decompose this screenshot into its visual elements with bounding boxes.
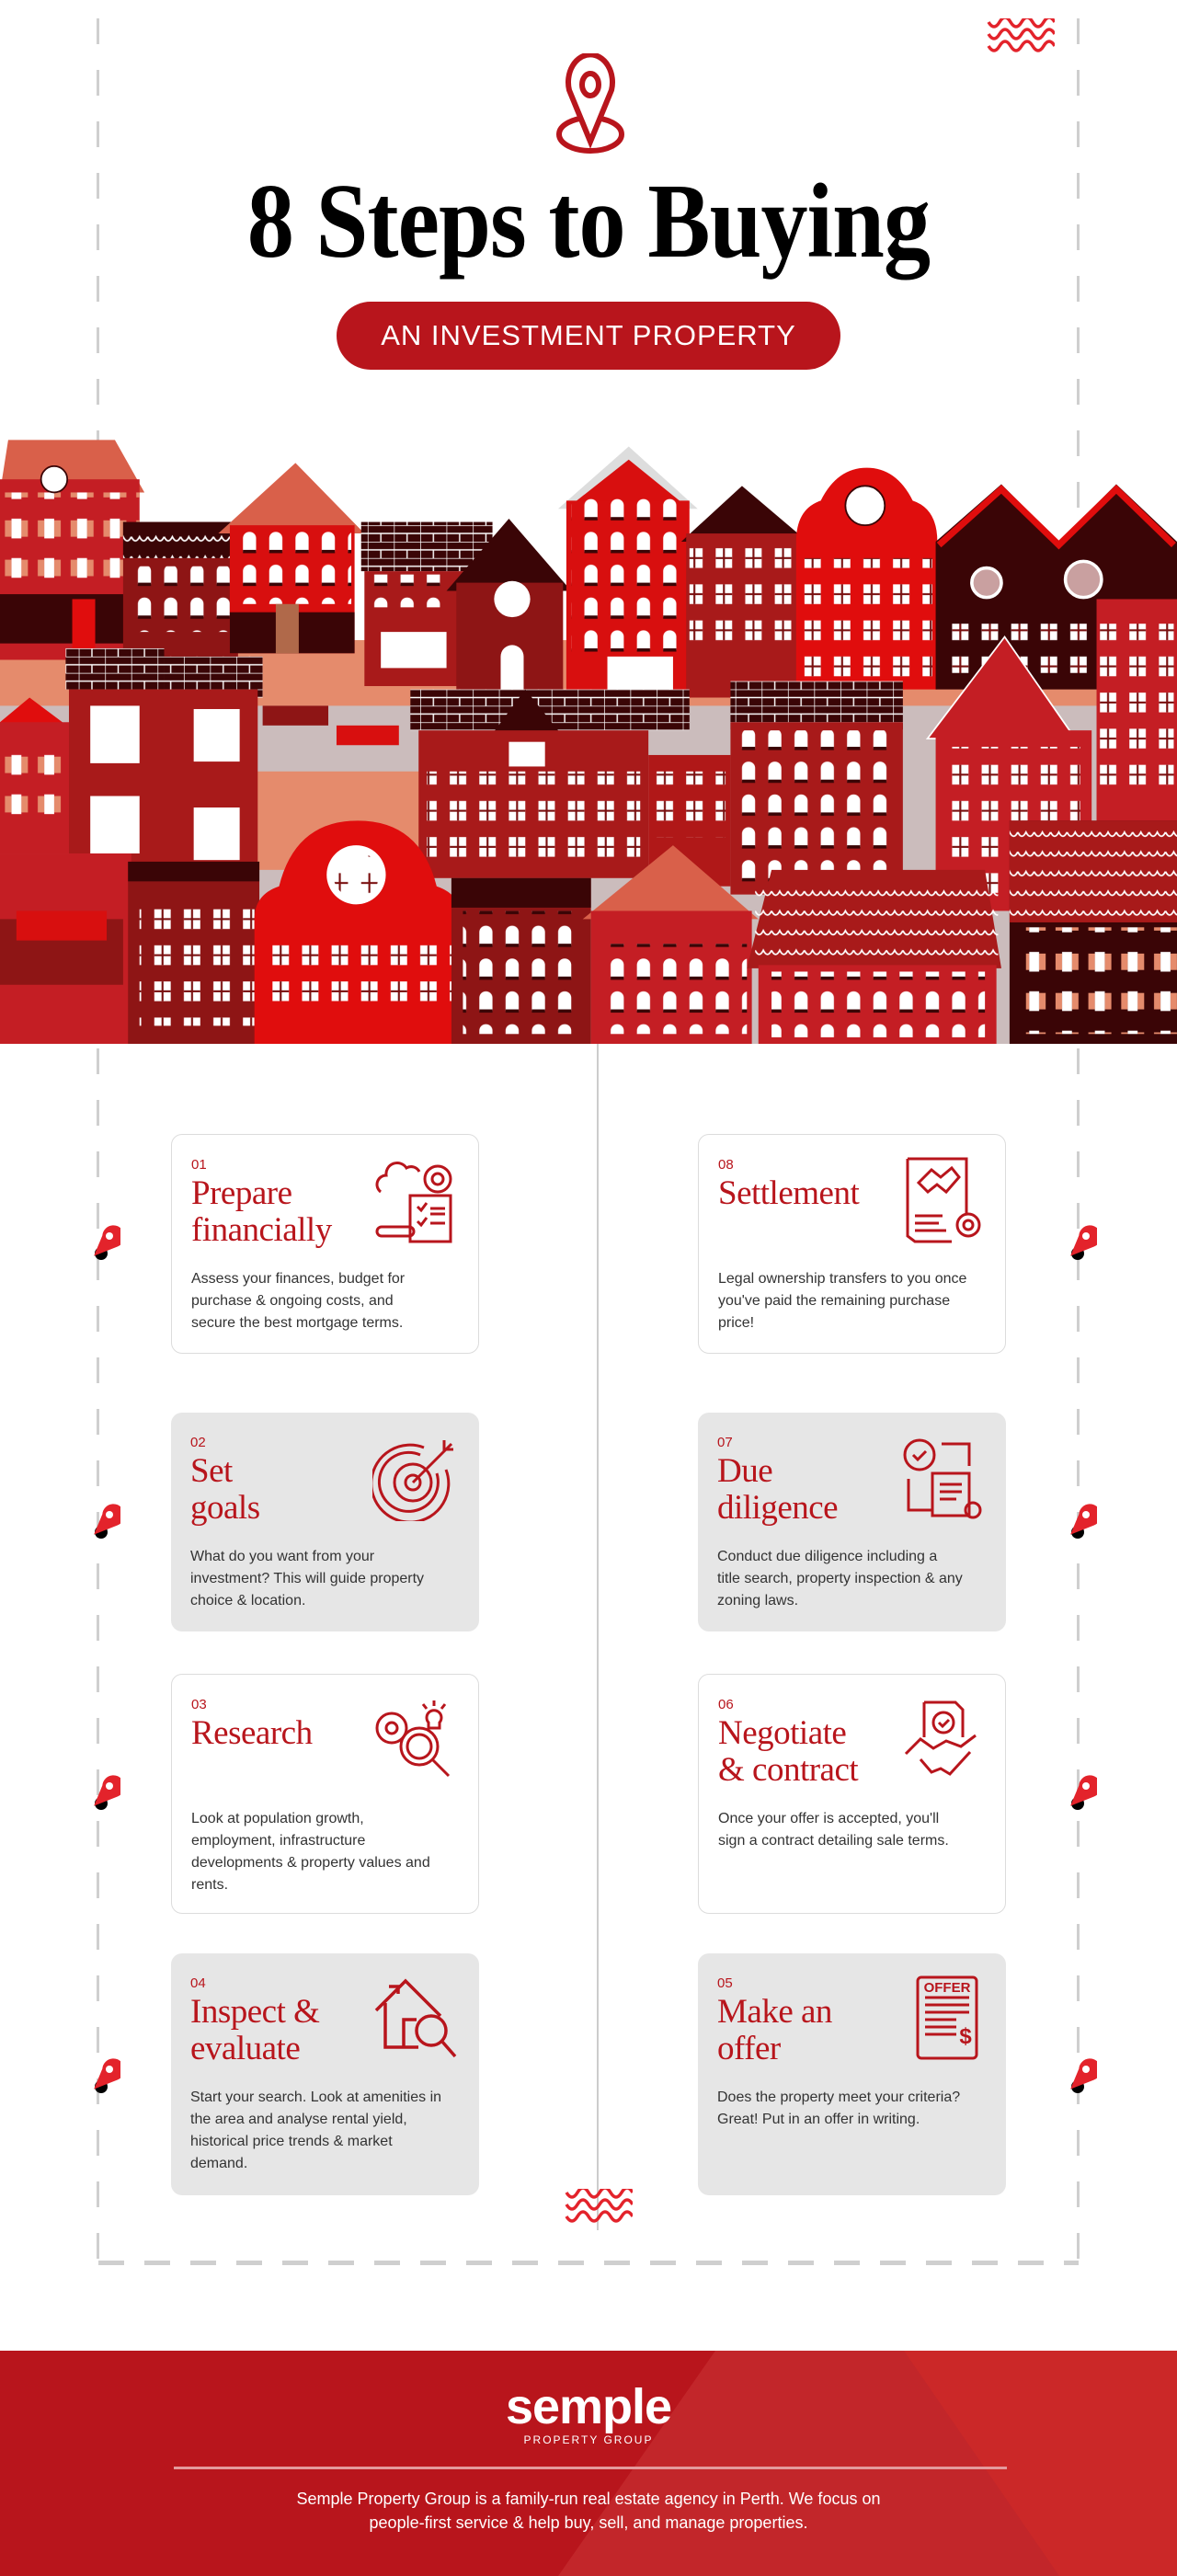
card 04: the area and analyse rental yield,: [190, 2112, 407, 2127]
card 05: offer: [717, 2030, 781, 2067]
card 02: choice & location.: [190, 1593, 305, 1609]
card 05: Does the property meet your criteria?: [717, 2089, 960, 2105]
illustration: houses: [0, 440, 1177, 1044]
card 07: Conduct due diligence including a: [717, 1549, 937, 1564]
card 04: evaluate: [190, 2030, 300, 2067]
card 07: zoning laws.: [717, 1593, 798, 1609]
subtitle pill: [337, 302, 840, 370]
card 04: Inspect &: [190, 1993, 319, 2031]
logo: PROPERTY GROUP: [524, 2433, 653, 2446]
card 05: 05: [717, 1975, 733, 1991]
card 08: [698, 1134, 1006, 1354]
card 04: Start your search. Look at amenities in: [190, 2089, 441, 2105]
icon: offer document: [916, 1975, 978, 2060]
icon: target: [372, 1440, 453, 1521]
footer text: people-first service & help buy, sell, and manage properties.: [370, 2513, 807, 2532]
card 03: [171, 1674, 479, 1914]
card 03: developments & property values and: [191, 1855, 430, 1871]
footer: [0, 2351, 1177, 2576]
pin 2: [94, 1504, 120, 1539]
card 08: Legal ownership transfers to you once: [718, 1271, 966, 1287]
card 07: [698, 1413, 1006, 1631]
card 07: 07: [717, 1435, 733, 1450]
card 03: Research: [191, 1714, 313, 1752]
logo: semple: [506, 2379, 671, 2434]
divider: [174, 2467, 1007, 2469]
card 08: Settlement: [718, 1174, 859, 1212]
pin 4: [94, 2058, 120, 2093]
card 06: [698, 1674, 1006, 1914]
card 02: investment? This will guide property: [190, 1571, 424, 1586]
card 06: Negotiate: [718, 1714, 846, 1752]
card 04: historical price trends & market: [190, 2134, 393, 2149]
card 05: [698, 1953, 1006, 2195]
card 04: 04: [190, 1975, 206, 1991]
card 07: title search, property inspection & any: [717, 1571, 963, 1586]
card 01: Prepare: [191, 1174, 292, 1212]
footer text: Semple Property Group is a family-run real estate agency in Perth. We focus on: [297, 2490, 880, 2508]
icon: plan: [375, 1162, 452, 1243]
card 02: Set: [190, 1452, 233, 1490]
card 07: Due: [717, 1452, 772, 1490]
icon: gear documents: [903, 1438, 982, 1519]
card 08: you've paid the remaining purchase: [718, 1293, 950, 1309]
icon: location pin: [556, 53, 624, 154]
card 02: What do you want from your: [190, 1549, 374, 1564]
card 03: Look at population growth,: [191, 1811, 364, 1826]
card 02: 02: [190, 1435, 206, 1450]
pin 6: [1070, 1504, 1097, 1539]
card 01: purchase & ongoing costs, and: [191, 1293, 394, 1309]
card 03: employment, infrastructure: [191, 1833, 365, 1849]
card 01: 01: [191, 1157, 207, 1173]
dashed frame bottom: [98, 2261, 1079, 2265]
icon: offer document: OFFER: [924, 1980, 971, 1996]
card 05: Great! Put in an offer in writing.: [717, 2112, 920, 2127]
card 01: financially: [191, 1211, 332, 1249]
pin 3: [94, 1775, 120, 1810]
card 01: Assess your finances, budget for: [191, 1271, 405, 1287]
card 08: price!: [718, 1315, 754, 1331]
card 06: 06: [718, 1697, 734, 1712]
card 02: goals: [190, 1489, 260, 1527]
icon: house search: [375, 1979, 456, 2058]
pin 8: [1070, 2058, 1097, 2093]
card 03: rents.: [191, 1877, 228, 1893]
dashed frame right: [1077, 18, 1080, 2262]
card 04: [171, 1953, 479, 2195]
icon: wave bottom: [565, 2189, 633, 2223]
card 03: 03: [191, 1697, 207, 1712]
footer text: [297, 2490, 880, 2532]
card 06: Once your offer is accepted, you'll: [718, 1811, 939, 1826]
pin 1: [94, 1225, 120, 1260]
icon: offer document: $: [959, 2024, 972, 2049]
card 06: sign a contract detailing sale terms.: [718, 1833, 949, 1849]
card 01: secure the best mortgage terms.: [191, 1315, 403, 1331]
card 02: [171, 1413, 479, 1631]
icon: handshake document: [907, 1157, 980, 1243]
card 08: 08: [718, 1157, 734, 1173]
subtitle pill: AN INVESTMENT PROPERTY: [381, 319, 796, 351]
center timeline line: [597, 1044, 599, 2230]
card 07: diligence: [717, 1489, 838, 1527]
dashed frame left: [97, 18, 99, 2262]
pin 5: [1070, 1225, 1097, 1260]
card 01: [171, 1134, 479, 1354]
pin 7: [1070, 1775, 1097, 1810]
card 05: Make an: [717, 1993, 832, 2031]
icon: research: [375, 1700, 450, 1777]
icon: contract handshake: [905, 1701, 977, 1776]
card 06: & contract: [718, 1751, 858, 1789]
icon: wave top right: [988, 18, 1055, 52]
card 04: demand.: [190, 2156, 247, 2171]
title: 8 Steps to Buying: [247, 163, 930, 280]
